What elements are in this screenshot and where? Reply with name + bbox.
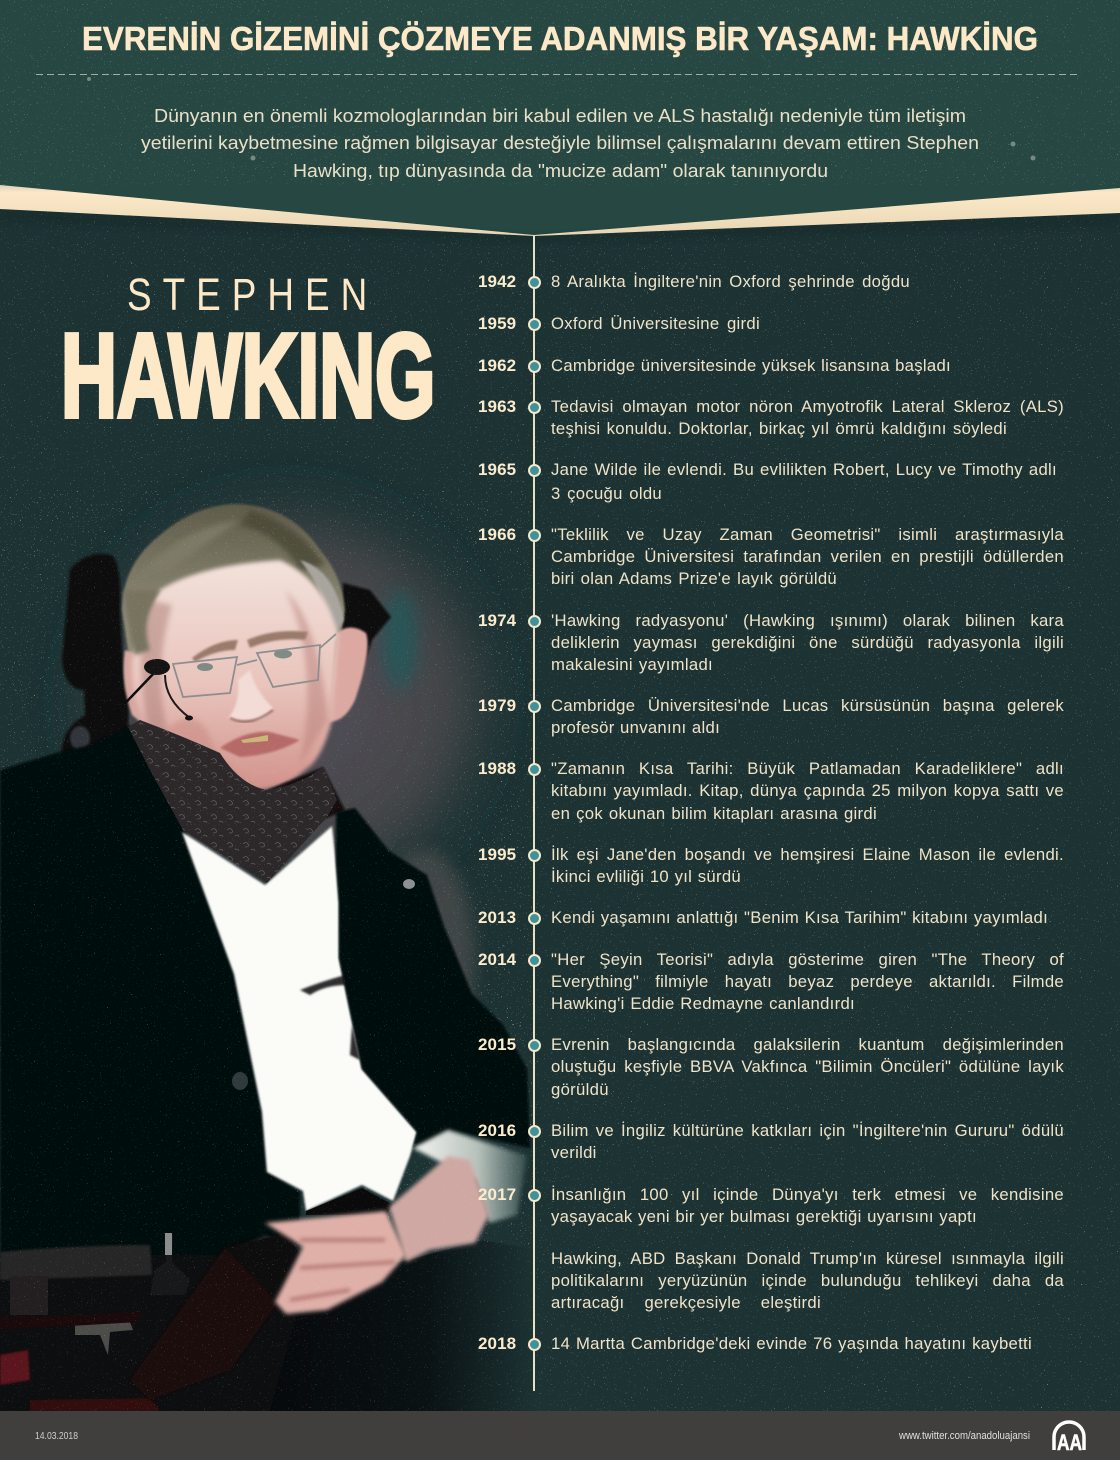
scarf <box>128 720 337 883</box>
entry: 2016: 2016 <box>478 1121 516 1140</box>
entry: 2013: 2013 <box>478 908 516 927</box>
entry: 2018: 14 Martta Cambridge'deki evinde 76 yaşında hayatını kaybetti <box>551 1334 1032 1353</box>
entry: 1963: teşhisi konuldu. Doktorlar, birkaç yıl ömrü kaldığını söyledi <box>551 419 1007 438</box>
hands <box>389 1156 489 1262</box>
entry: 2017 second: politikalarını yeryüzünün içinde bulunduğu tehlikeyi daha da <box>551 1271 1064 1290</box>
glasses <box>173 634 336 697</box>
eyebrows <box>192 631 308 662</box>
backdrop halo <box>30 475 500 925</box>
entry: 1974: 'Hawking radyasyonu' (Hawking ışınımı) olarak bilinen kara <box>551 611 1064 630</box>
larger stars <box>87 77 1036 160</box>
entry: 2014 <box>478 950 1064 1013</box>
star field header <box>0 0 1120 185</box>
entry: 1963: Tedavisi olmayan motor nöron Amyotrofik Lateral Skleroz (ALS) <box>551 397 1064 416</box>
ear left <box>124 650 155 730</box>
entry: 2015 <box>478 1035 1064 1099</box>
entry: 1942: 1942 <box>478 272 516 291</box>
ear right <box>328 628 368 722</box>
side hair <box>124 590 160 655</box>
eyes <box>197 663 213 671</box>
entry: 1965: Jane Wilde ile evlendi. Bu evlilikten Robert, Lucy ve Timothy adlı <box>551 460 1057 479</box>
footer date: 14.03.2018 <box>35 1430 78 1442</box>
entry: 1963 <box>478 397 1064 438</box>
entry: 2015: oluştuğu keşfiyle BBVA Vakfınca "Bilimin Öncüleri" ödülüne layık <box>551 1057 1064 1076</box>
entry: 2015: Evrenin başlangıcında galaksilerin kuantum değişimlerinden <box>551 1035 1064 1054</box>
trousers <box>250 1240 535 1411</box>
entry: 2016: verildi <box>551 1143 597 1162</box>
entry: 2013: Kendi yaşamını anlattığı "Benim Kısa Tarihim" kitabını yayımladı <box>551 908 1048 927</box>
entry: 1965 <box>478 460 1057 503</box>
chair armrest <box>130 1234 300 1400</box>
entry: 2017 second: Hawking, ABD Başkanı Donald Trump'ın küresel ısınmayla ilgili <box>551 1249 1064 1268</box>
chair arm <box>0 1245 152 1280</box>
neck shadow <box>267 767 345 830</box>
name: Stephen: STEPHEN <box>127 270 367 320</box>
entry: 1988: en çok okunan bilim kitapları arasına girdi <box>551 804 877 823</box>
face <box>132 560 338 790</box>
entry: 1974: 1974 <box>478 611 516 630</box>
portrait <box>0 475 535 1411</box>
chair base <box>0 1255 300 1411</box>
entry: 1995: İkinci evliliği 10 yıl sürdü <box>551 867 741 886</box>
entry: 2017 second: artıracağı gerekçesiyle eleştirdi <box>551 1293 821 1312</box>
jacket left <box>0 725 300 1260</box>
microphone <box>93 659 193 737</box>
entry: 2017 second <box>551 1249 1064 1312</box>
entry: 1974: deliklerin yayması gerekdiğini öne sürdüğü radyasyonla ilgili <box>551 633 1064 652</box>
entry: 2014: 2014 <box>478 950 516 969</box>
entry: 1959: 1959 <box>478 314 516 333</box>
intro text: Dünyanın en önemli kozmologlarından biri kabul edilen ve ALS hastalığı nedeniyle tüm iletişim <box>154 105 966 126</box>
name: Hawking: HAWKING <box>61 309 435 442</box>
footer bar <box>0 1411 1120 1460</box>
entry: 1979: profesör unvanını aldı <box>551 718 720 737</box>
entry: 2017: İnsanlığın 100 yıl içinde Dünya'yı terk etmesi ve kendisine <box>551 1185 1064 1204</box>
entry: 2014: Everything" filmiyle hayatı beyaz perdeye aktarıldı. Filmde <box>551 972 1064 991</box>
entry: 1974 <box>478 611 1064 674</box>
entry: 1966: biri olan Adams Prize'e layık görüldü <box>551 569 837 588</box>
star overlay <box>0 490 535 1411</box>
mouth <box>220 732 300 757</box>
icon: AA logo: AA <box>1057 1430 1082 1455</box>
jacket right <box>336 808 530 1148</box>
hair <box>122 504 345 665</box>
footer link: www.twitter.com/anadoluajansi <box>898 1430 1030 1442</box>
intro text: Hawking, tıp dünyasında da "mucize adam" olarak tanınıyordu <box>293 160 828 181</box>
header panel <box>0 0 1120 236</box>
entry: 1979 <box>478 696 1064 737</box>
entry: 2017 <box>478 1185 1064 1226</box>
entry: 1959: Oxford Üniversitesine girdi <box>551 314 760 333</box>
entry: 1966: "Teklilik ve Uzay Zaman Geometrisi" isimli araştırmasıyla <box>551 525 1064 544</box>
entry: 1966: Cambridge Üniversitesi tarafından verilen en prestijli ödüllerden <box>551 547 1064 566</box>
entry: 2018: 2018 <box>478 1334 516 1353</box>
joystick <box>150 1235 190 1295</box>
timeline axis <box>533 235 535 1391</box>
band shadow <box>0 209 1120 242</box>
dashed divider <box>36 74 1081 76</box>
entry: 1962: Cambridge üniversitesinde yüksek lisansına başladı <box>551 356 951 375</box>
icon: AA logo <box>1054 1422 1084 1455</box>
cream band <box>0 185 1120 236</box>
entry: 1966 <box>478 525 1064 588</box>
headrest left <box>62 554 129 760</box>
shirt cuff <box>413 1130 527 1223</box>
belt shadow <box>306 1188 393 1215</box>
title: EVRENİN GİZEMİNİ ÇÖZMEYE ADANMIŞ BİR YAŞAM: HAWKİNG <box>82 20 1038 57</box>
entry: 1979: Cambridge Üniversitesi'nde Lucas kürsüsünün başına gelerek <box>551 696 1064 715</box>
entry: 2017: yaşayacak yeni bir yer bulması gerektiği uyarısını yaptı <box>551 1207 977 1226</box>
entry: 1962: 1962 <box>478 356 516 375</box>
entry: 1988: kitabını yayımladı. Kitap, dünya çapında 25 milyon kopya sattı ve <box>551 781 1064 800</box>
shirt <box>182 826 417 1211</box>
entry: 1965: 3 çocuğu oldu <box>551 484 662 503</box>
entry: 2017: 2017 <box>478 1185 516 1204</box>
entry: 1974: makalesini yayımladı <box>551 655 713 674</box>
intro text <box>141 105 979 181</box>
entry: 2015: 2015 <box>478 1035 516 1054</box>
entry: 1995: 1995 <box>478 845 516 864</box>
entry: 1995: İlk eşi Jane'den boşandı ve hemşiresi Elaine Mason ile evlendi. <box>551 845 1064 864</box>
jacket button <box>232 1072 248 1090</box>
entry: 2014: Hawking'i Eddie Redmayne canlandırdı <box>551 994 855 1013</box>
entry: 1988 <box>478 759 1064 823</box>
entry: 1995 <box>478 845 1064 886</box>
entry: 1966: 1966 <box>478 525 516 544</box>
entry: 2014: "Her Şeyin Teorisi" adıyla gösterime giren "The Theory of <box>551 950 1064 969</box>
entry: 1963: 1963 <box>478 397 516 416</box>
entry: 2015: görüldü <box>551 1080 609 1099</box>
intro text: yetilerini kaybetmesine rağmen bilgisayar desteğiyle bilimsel çalışmalarını devam ettiren Stephen <box>141 132 979 153</box>
entry: 2016 <box>478 1121 1064 1162</box>
entry: 1988: "Zamanın Kısa Tarihi: Büyük Patlamadan Karadeliklere" adlı <box>551 759 1064 778</box>
nose <box>228 670 273 721</box>
entry: 1942: 8 Aralıkta İngiltere'nin Oxford şehrinde doğdu <box>551 272 910 291</box>
headrest right <box>340 583 391 672</box>
entry: 1979: 1979 <box>478 696 516 715</box>
entry: 1965: 1965 <box>478 460 516 479</box>
entry: 1988: 1988 <box>478 759 516 778</box>
entry: 2016: Bilim ve İngiliz kültürüne katkıları için "İngiltere'nin Gururu" ödülü <box>551 1121 1064 1140</box>
